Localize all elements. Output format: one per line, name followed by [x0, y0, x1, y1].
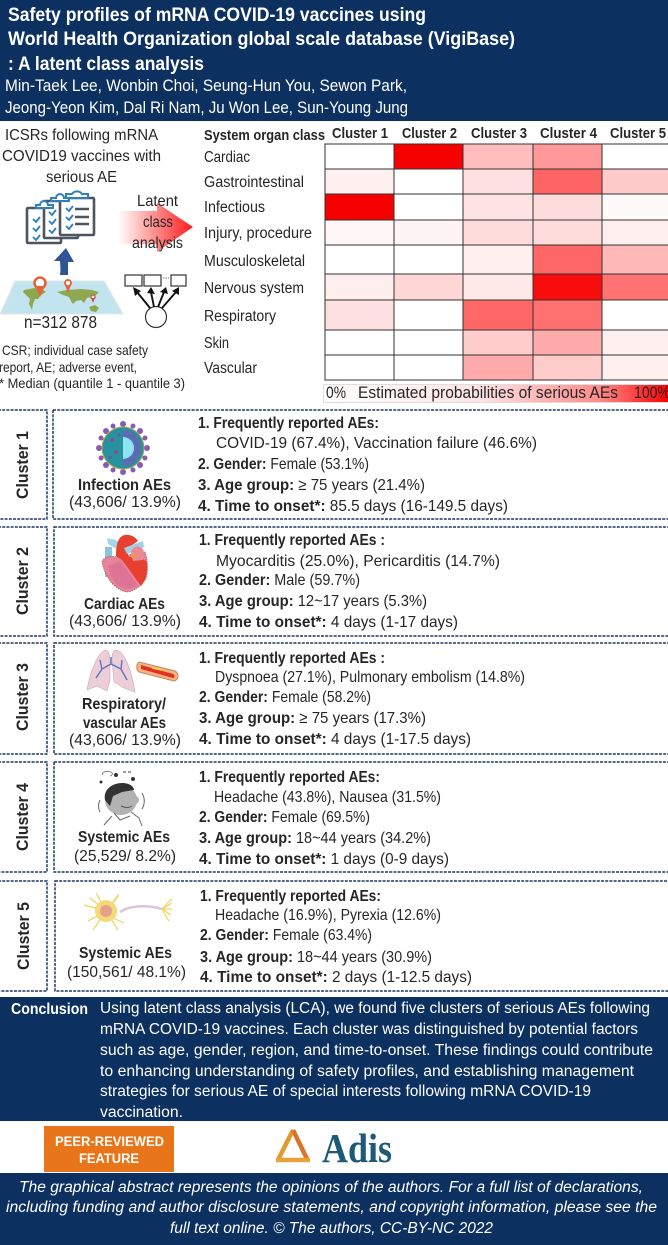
heatmap row labels: Musculoskeletal: [204, 253, 305, 270]
abbreviation footnote: CSR; individual case safety: [2, 342, 148, 358]
panel: conclusion: [0, 997, 668, 1121]
cluster 4 name and size: (25,529/ 8.2%): [74, 848, 176, 865]
cluster 1 details: 2. Gender: Female (53.1%): [198, 456, 369, 473]
cluster 1 label: Cluster 1: [13, 431, 32, 499]
population heading: COVID19 vaccines with: [2, 148, 161, 165]
heatmap column headers: Cluster 3: [471, 125, 527, 142]
authors: Min-Taek Lee, Wonbin Choi, Seung-Hun You, Sewon Park,: [5, 77, 407, 95]
title: : A latent class analysis: [8, 53, 204, 75]
footer disclaimer: [0, 1173, 668, 1245]
cluster 1 name and size: Infection AEs: [78, 477, 171, 494]
cluster 5 name and size: Systemic AEs: [79, 945, 172, 962]
title: World Health Organization global scale database (VigiBase): [8, 28, 515, 50]
cluster 3 details: 1. Frequently reported AEs :: [199, 650, 385, 667]
arrow: latent class analysis: [118, 193, 193, 252]
arrow: latent class analysis: analysis: [132, 235, 183, 252]
population heading: [2, 127, 161, 186]
icon: lungs and blood vessel: [87, 650, 178, 692]
cluster 2 details: 3. Age group: 12~17 years (5.3%): [199, 593, 427, 610]
cluster 4 name and size: [74, 829, 176, 865]
abbreviation footnote: report, AE; adverse event,: [0, 359, 137, 375]
conclusion text: strategies for serious AE of special interests following mRNA COVID-19: [100, 1083, 591, 1100]
cluster 5 details: 4. Time to onset*: 2 days (1-12.5 days): [200, 969, 472, 986]
heatmap column headers: System organ class: [204, 127, 325, 144]
cluster 2 label: Cluster 2: [13, 547, 32, 615]
footer disclaimer: including funding and author disclosure statements, and copyright information, please see the: [6, 1199, 657, 1216]
cluster 3 details: 3. Age group: ≥ 75 years (17.3%): [199, 710, 426, 727]
population heading: ICSRs following mRNA: [5, 127, 158, 144]
cluster 3 details: 2. Gender: Female (58.2%): [199, 689, 371, 706]
conclusion text: to enhancing understanding of safety profiles, and establishing management: [100, 1063, 635, 1080]
icon: neuron: [84, 893, 172, 930]
heatmap row labels: Injury, procedure: [204, 225, 312, 242]
panel: system organ class heatmap: [204, 125, 668, 402]
cluster 5 details: Headache (16.9%), Pyrexia (12.6%): [215, 907, 441, 924]
cluster 2 name and size: [69, 596, 181, 630]
heatmap column headers: Cluster 1: [332, 125, 388, 142]
panel: cluster 3: [0, 643, 668, 754]
conclusion text: vaccination.: [100, 1104, 183, 1121]
arrow: map to reports: [54, 248, 74, 275]
sample size: n=312 878: [24, 312, 97, 332]
panel: study population: [0, 127, 185, 391]
cluster 3 label: Cluster 3: [13, 663, 32, 731]
cluster 1 details: 3. Age group: ≥ 75 years (21.4%): [198, 477, 425, 494]
badge: peer-reviewed feature: [44, 1126, 174, 1172]
cluster 5 name and size: [67, 945, 186, 981]
cluster 5 details: [200, 888, 472, 986]
cluster 1 name and size: (43,606/ 13.9%): [69, 494, 181, 511]
conclusion text: Using latent class analysis (LCA), we found five clusters of serious AEs following: [100, 1000, 650, 1017]
footer disclaimer: full text online. © The authors, CC-BY-NC 2022: [170, 1220, 493, 1237]
cluster 2 details: Myocarditis (25.0%), Pericarditis (14.7%): [216, 553, 500, 570]
population heading: serious AE: [46, 169, 117, 186]
heatmap column headers: [204, 125, 666, 144]
cluster 4 details: 2. Gender: Female (69.5%): [199, 809, 370, 826]
conclusion heading: Conclusion: [11, 1001, 88, 1018]
conclusion text: such as age, gender, region, and time-to-onset. These findings could contribute: [100, 1042, 653, 1059]
cluster 3 name and size: Respiratory/: [82, 696, 166, 713]
cluster 3 name and size: (43,606/ 13.9%): [69, 732, 181, 749]
heatmap row labels: Infectious: [204, 199, 265, 216]
title: Safety profiles of mRNA COVID-19 vaccines using: [8, 4, 426, 26]
cluster 3 name and size: [69, 696, 181, 749]
authors: Jeong-Yeon Kim, Dal Ri Nam, Ju Won Lee, Sun-Young Jung: [5, 99, 408, 117]
abbreviation footnote: * Median (quantile 1 - quantile 3): [0, 375, 185, 391]
cluster 5 details: 1. Frequently reported AEs:: [200, 888, 381, 905]
abbreviation footnote: [0, 342, 185, 391]
arrow: latent class analysis: class: [143, 214, 173, 231]
cluster 1 details: COVID-19 (67.4%), Vaccination failure (46.6%): [216, 435, 537, 452]
authors: [5, 77, 408, 117]
cluster 4 details: 4. Time to onset*: 1 days (0-9 days): [199, 851, 449, 868]
conclusion text: mRNA COVID-19 vaccines. Each cluster was distinguished by potential factors: [100, 1021, 638, 1038]
cluster 3 details: Dyspnoea (27.1%), Pulmonary embolism (14.8%): [215, 669, 525, 686]
heatmap row labels: [204, 149, 312, 377]
arrow: latent class analysis: Latent: [137, 193, 179, 210]
cluster 2 details: 2. Gender: Male (59.7%): [199, 572, 360, 589]
cluster 5 details: 2. Gender: Female (63.4%): [200, 927, 372, 944]
cluster 5 name and size: (150,561/ 48.1%): [67, 964, 186, 981]
heatmap row labels: Nervous system: [204, 280, 304, 297]
cluster 3 details: 4. Time to onset*: 4 days (1-17.5 days): [199, 731, 471, 748]
icon: world map with pins: [0, 278, 123, 314]
heatmap column headers: Cluster 4: [540, 125, 598, 142]
cluster 1 details: 4. Time to onset*: 85.5 days (16-149.5 days): [198, 498, 508, 515]
cluster 4 label: Cluster 4: [13, 782, 32, 851]
heatmap legend: 0%: [326, 384, 346, 402]
logo: Adis: [276, 1125, 392, 1171]
cluster 1 details: [198, 415, 537, 515]
logo: Adis: Adis: [322, 1125, 392, 1171]
cluster 1 name and size: [69, 477, 181, 511]
cluster 4 details: [199, 769, 449, 868]
cluster 4 details: 1. Frequently reported AEs:: [199, 769, 380, 786]
cluster 1 details: 1. Frequently reported AEs:: [198, 415, 379, 432]
cluster 2 name and size: (43,606/ 13.9%): [69, 613, 181, 630]
badge: peer-reviewed feature: FEATURE: [79, 1151, 139, 1166]
heatmap legend: Estimated probabilities of serious AEs: [358, 384, 618, 402]
badge: peer-reviewed feature: PEER-REVIEWED: [55, 1134, 164, 1149]
latent class model diagram: [125, 275, 186, 328]
cluster 3 name and size: vascular AEs: [83, 715, 166, 732]
heatmap row labels: Skin: [204, 335, 229, 352]
title: [8, 4, 515, 75]
panel: cluster 2: [0, 527, 668, 636]
cluster 2 name and size: Cardiac AEs: [84, 596, 165, 613]
panel: cluster 5: [0, 881, 668, 991]
cluster 5 label: Cluster 5: [14, 902, 33, 970]
cluster 5 details: 3. Age group: 18~44 years (30.9%): [200, 949, 432, 966]
cluster 2 details: 4. Time to onset*: 4 days (1-17 days): [199, 614, 458, 631]
panel: cluster 1: [0, 410, 668, 519]
conclusion text: [100, 1000, 653, 1121]
cluster 2 details: 1. Frequently reported AEs :: [199, 532, 385, 549]
footer disclaimer: The graphical abstract represents the opinions of the authors. For a full list of declarations,: [19, 1179, 643, 1196]
cluster 3 details: [199, 650, 525, 748]
heatmap row labels: Cardiac: [204, 149, 250, 166]
icon: dizzy person: [98, 771, 144, 826]
cluster 4 name and size: Systemic AEs: [78, 829, 170, 846]
heatmap row labels: Gastrointestinal: [204, 174, 304, 191]
heatmap row labels: Respiratory: [204, 308, 276, 325]
panel: cluster 4: [0, 762, 668, 872]
heatmap column headers: Cluster 2: [402, 125, 457, 142]
icon: heart: [102, 535, 147, 592]
heatmap row labels: Vascular: [204, 360, 257, 377]
cluster 4 details: 3. Age group: 18~44 years (34.2%): [199, 830, 431, 847]
icon: clipboards: [27, 191, 94, 243]
heatmap grid: [325, 144, 668, 380]
icon: virus: [96, 421, 150, 475]
cluster 2 details: [199, 532, 500, 631]
cluster 4 details: Headache (43.8%), Nausea (31.5%): [214, 789, 441, 806]
header banner: [0, 0, 668, 121]
